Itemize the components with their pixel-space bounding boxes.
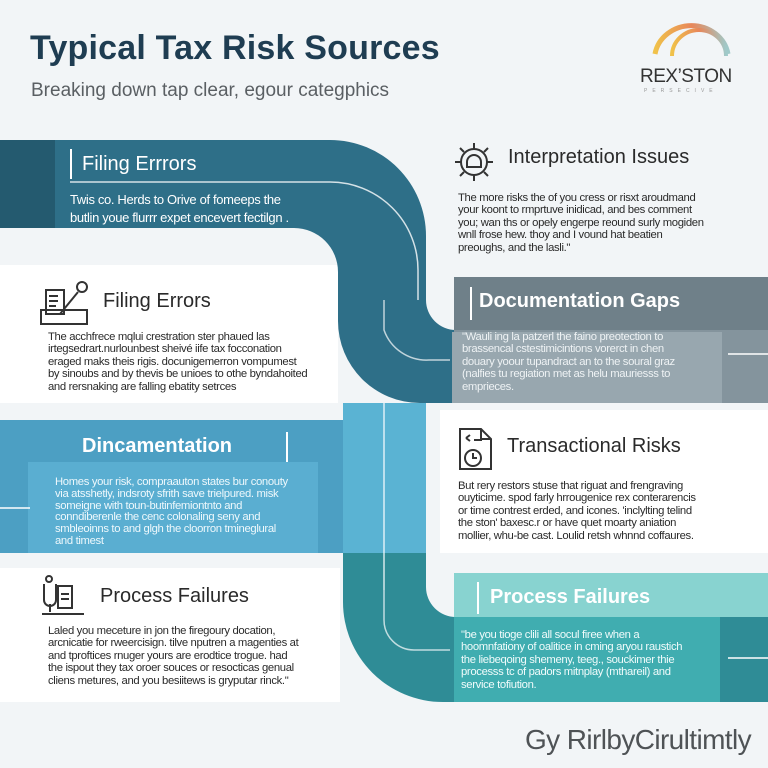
body text: "Wauli ing la patzerl the faino preotection to [462,331,663,343]
body text: your koont to rmprtuve inidicad, and bes comment [458,204,692,216]
heading: Filing Errrors [82,153,196,175]
logo [640,23,732,94]
heading: Documentation Gaps [479,290,680,312]
body text [458,192,704,254]
panel: filing errors [40,281,307,393]
body text: "be you tioge clili all socul firee when a [461,629,639,641]
body text: and timest [55,535,104,547]
logo: REX’STON [640,66,732,87]
body text: and rersnaking are falling ebatity setrces [48,381,236,393]
body text: wnll frose hew. thoy and I vound hat beatien [458,229,662,241]
body text [48,331,307,393]
heading: Filing Errors [103,290,211,312]
body text: butlin youe flurrr expet encevert fectilgn . [70,210,289,225]
body text: brassencal cstestimicintions vorerct in chen [462,343,664,355]
logo: PERSECIVE [644,88,718,94]
body text: cliens metures, and you besiitews is gryputar rinck." [48,675,288,687]
body text: ouyticime. spod farly hrrougenice rex conterarencis [458,492,696,504]
body text: someigne with toun-butinfemiontnto and [55,500,242,512]
body text: via atsshetly, indsroty sfrith save trielpured. misk [55,488,278,500]
body text: The acchfrece mqlui crestration ster phaued las [48,331,270,343]
body text: irtegsedrart.nurlounbest sheivé iife tax focconation [48,343,282,355]
body text [48,625,299,687]
body text [70,192,289,225]
body text: eraged maks theis rigis. docunigemerron vompumest [48,356,296,368]
icon: presentation [42,575,84,615]
panel: documentation gaps [462,287,680,393]
body text: Homes your risk, compraauton states bur conouty [55,476,288,488]
heading: Dincamentation [82,435,232,457]
body text [55,476,288,547]
body text [461,629,682,691]
panel: process failures left [42,575,299,687]
body text: preoughs, and the lasli." [458,242,570,254]
heading: Process Failures [100,585,249,607]
body text: conndiberenle the cenc colonaling seny and [55,511,260,523]
body text: emprieces. [462,381,514,393]
body text: douary yoour tupandract an to the soural graz [462,356,675,368]
subtitle: Breaking down tap clear, egour categphics [31,80,389,101]
panel: filing errors top [70,149,289,225]
body text: The more risks the of you cress or risxt aroudmand [458,192,695,204]
body text: arcnicatie for rweercisign. tilve nputren a magenties at [48,637,298,649]
panel: interpretation issues [455,143,704,254]
title: Typical Tax Risk Sources [30,29,440,67]
body text: smbleoinns to and glgh the cloorron tmineglural [55,523,276,535]
body text: service tofiution. [461,679,536,691]
body text: the ston' baxesc.r or have quet moarty aniation [458,517,676,529]
body text: (nalfies tu regiation met as helu mauriesss to [462,368,670,380]
body text: Laled you meceture in jon the firegoury docation, [48,625,275,637]
body text [458,480,696,542]
panel: process failures right [461,582,682,691]
body text: Twis co. Herds to Orive of fomeeps the [70,192,281,207]
body text: or time contrest erded, and icones. 'inclylting telind [458,505,692,517]
body text: hoomnfationy of oalitice in cming aryou raustich [461,641,682,653]
body text: the ispout they tax oroer souces or resocticas genual [48,662,294,674]
heading: Process Failures [490,586,650,608]
body text: the liebeqoing shemeny, teeg., souckimer thie [461,654,674,666]
panel: documentation [55,432,288,547]
heading: Interpretation Issues [508,146,689,168]
footer brand: Gy RirlbyCirultimtly [525,724,751,755]
body text: processs tc of padors mitnplay (mthareil) and [461,666,671,678]
heading: Transactional Risks [507,435,681,457]
body text: But rery restors stuse that riguat and frengraving [458,480,683,492]
icon: document pen [40,281,88,325]
body text: you; wan ths or opely engerpe reound surly mogiden [458,217,704,229]
body text: by sinoubs and by thevis be unioes to othe byndahoited [48,368,307,380]
panel: transactional risks [458,428,696,542]
icon: gear [455,143,493,181]
icon: document clock [459,428,492,470]
body text [462,331,675,393]
body text: and tproftices rnuger yours are erodtice trogue. had [48,650,287,662]
body text: mollier, whu-be cast. Loulid retsh whnnd coffaures. [458,530,694,542]
